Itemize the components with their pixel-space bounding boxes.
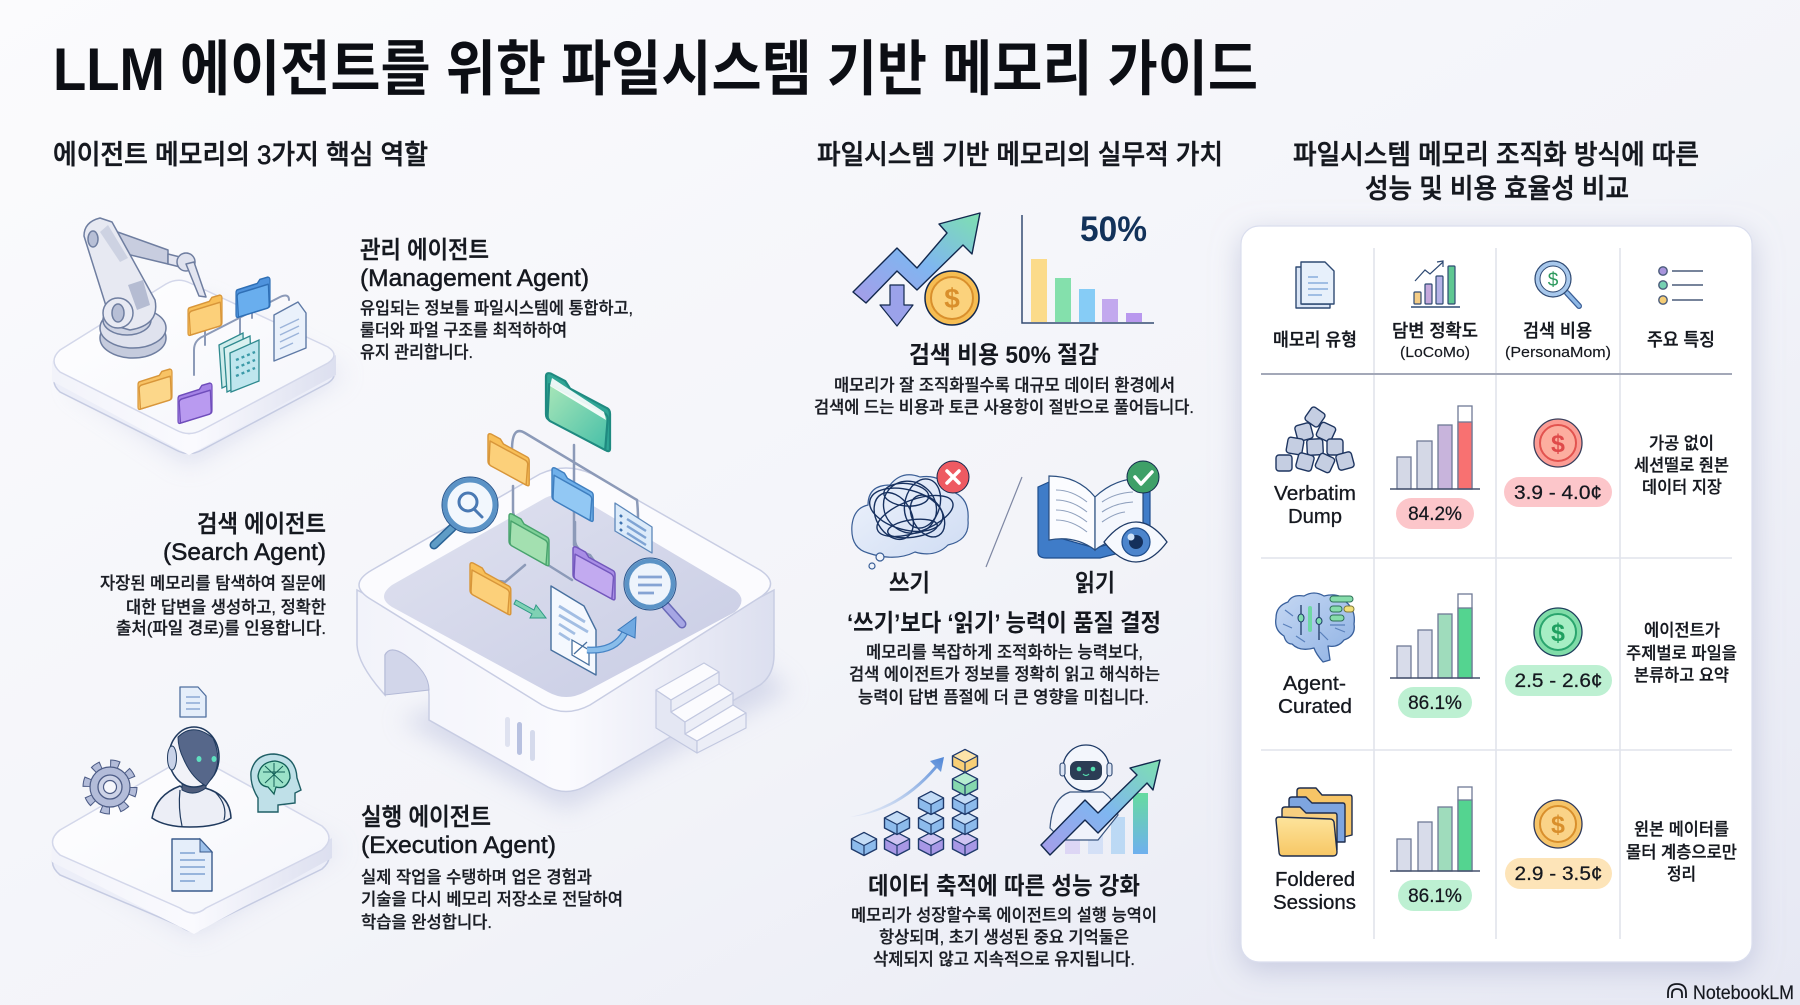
name xyxy=(1273,869,1356,914)
feature text: 에이전트가 xyxy=(1644,621,1720,640)
text: read over write: 검색 에이전트가 정보를 정확히 읽고 해식하는 xyxy=(849,665,1160,684)
text: execution agent xyxy=(361,804,623,932)
stairs xyxy=(656,663,746,753)
bar chart: 50 percent: 50% xyxy=(1080,210,1147,249)
divider slash xyxy=(986,477,1022,567)
name xyxy=(1278,673,1352,718)
blue curved arrow xyxy=(587,617,636,650)
feature text: 세션떨로 줜본 xyxy=(1634,456,1729,475)
row: foldered sessions xyxy=(1273,787,1737,914)
illustration: management agent platform xyxy=(52,218,345,465)
icon: stacked cubes with curve xyxy=(850,750,978,856)
accuracy pill: 86.1% xyxy=(1408,693,1462,714)
column headers: (PersonaMom) xyxy=(1505,345,1611,361)
cost pill: 3.9 - 4.0¢ xyxy=(1514,483,1602,504)
accuracy chart xyxy=(1390,787,1480,871)
text: data accumulation: 항상되며, 초기 생성된 중요 기억둘은 xyxy=(879,928,1129,947)
header icon: list xyxy=(1659,267,1703,304)
name: Verbatim xyxy=(1274,483,1356,505)
text: cost saving: 매모리가 잘 조직화필수록 대규모 데이터 환경에서 xyxy=(834,376,1175,395)
illustration: execution agent platform xyxy=(52,687,340,935)
folder purple xyxy=(178,373,212,434)
feature text xyxy=(1626,820,1737,884)
row: verbatim dump xyxy=(1274,406,1729,529)
accuracy pill xyxy=(1396,498,1474,529)
heading: practical value: 파일시스템 기반 메모리의 실무적 가치 xyxy=(817,140,1223,170)
feature text: 본류하고 요약 xyxy=(1634,666,1729,685)
text: execution agent: (Execution Agent) xyxy=(361,832,556,859)
feature text xyxy=(1634,434,1729,497)
text: read over write: ‘쓰기’보다 ‘읽기’ 능력이 품질 결정 xyxy=(847,610,1161,637)
folder orange lower xyxy=(470,563,511,615)
text: data accumulation: 메모리가 성장할수록 에이전트의 설행 능역이 xyxy=(851,906,1157,925)
text: search agent xyxy=(100,511,326,638)
cost pill: 2.5 - 2.6¢ xyxy=(1514,671,1602,692)
icon: robot with growth arrow xyxy=(1041,745,1160,855)
text: search agent: 검색 에이전트 xyxy=(197,511,326,538)
cost coin xyxy=(1534,419,1582,467)
big green folder xyxy=(546,373,610,451)
icon: pile of blocks xyxy=(1276,406,1355,474)
feature text: 윈본 메이터를 xyxy=(1634,820,1729,839)
name xyxy=(1274,483,1356,528)
tree connectors xyxy=(490,431,638,590)
feature text: 주제벌로 파일을 xyxy=(1626,644,1737,663)
heading: comparison xyxy=(1293,140,1699,204)
gear xyxy=(87,764,133,810)
folder orange xyxy=(488,434,529,486)
column headers: 검색 비용 xyxy=(1523,321,1592,341)
text: execution agent: 학습을 완성합니다. xyxy=(361,913,492,932)
magnifier left xyxy=(434,477,498,545)
text: execution agent: 기술을 다시 베모리 저장소로 전달하여 xyxy=(361,890,623,909)
icon: brain with sliders xyxy=(1276,593,1354,662)
icon: zigzag arrow with coin: $ xyxy=(944,283,960,314)
accuracy pill: 84.2% xyxy=(1408,504,1462,525)
accuracy chart xyxy=(1390,406,1480,489)
accuracy pill: 86.1% xyxy=(1408,886,1462,907)
labels: write and read xyxy=(889,570,1115,597)
list document xyxy=(615,503,652,553)
text: read over write: 능력이 답변 픔절에 더 큰 영향을 미칩니다. xyxy=(858,688,1149,707)
text: management agent: 룰더와 파얼 구조를 최적하하여 xyxy=(360,321,567,340)
name: Foldered xyxy=(1275,869,1355,891)
text: cost saving: 검색 비용 50% 절감 xyxy=(909,342,1099,369)
heading: agent roles: 에이전트 메모리의 3가지 핵심 역할 xyxy=(53,140,428,170)
text: cost saving xyxy=(814,342,1194,417)
folder green xyxy=(509,514,549,566)
column headers: (LoCoMo) xyxy=(1400,345,1470,361)
text: search agent: 대한 답변을 생성하고, 정확한 xyxy=(126,598,326,617)
folder orange lower xyxy=(138,359,172,420)
accuracy pill xyxy=(1398,880,1472,911)
text: management agent: (Management Agent) xyxy=(360,265,589,292)
robot arm xyxy=(84,218,206,358)
text: data accumulation: 삭제되지 않고 지속적으로 유지됩니다. xyxy=(873,950,1135,969)
header icon: documents xyxy=(1296,262,1334,308)
feature text: 데이터 지장 xyxy=(1642,478,1722,497)
icon: zigzag arrow with coin xyxy=(853,213,980,326)
panel: comparison table xyxy=(1241,226,1752,962)
column headers: 주요 특징 xyxy=(1647,330,1715,350)
name: Agent- xyxy=(1283,673,1346,695)
cost coin xyxy=(1534,608,1582,656)
brand: NotebookLM: NotebookLM xyxy=(1693,983,1794,1004)
accuracy chart xyxy=(1390,594,1480,678)
cost pill xyxy=(1505,665,1612,696)
folder blue xyxy=(236,267,270,328)
header icon: cost magnifier: $ xyxy=(1548,270,1559,291)
document bottom xyxy=(172,839,212,891)
row: agent curated xyxy=(1276,593,1737,718)
icon: folder stack xyxy=(1276,788,1352,856)
vents xyxy=(505,717,535,761)
cost pill xyxy=(1504,477,1612,507)
text: execution agent: 실제 작업을 수탱하며 업은 경험과 xyxy=(361,868,592,887)
text: search agent: (Search Agent) xyxy=(163,539,326,566)
magnifier right xyxy=(624,558,682,624)
cost coin: $ xyxy=(1551,811,1565,839)
name: Dump xyxy=(1288,506,1342,528)
text: search agent: 자장된 메모리를 탐색하여 질문에 xyxy=(100,574,326,593)
robot xyxy=(152,727,231,827)
feature text: 몰터 계층으로만 xyxy=(1626,843,1737,862)
central document xyxy=(551,586,596,675)
text: execution agent: 실행 에이전트 xyxy=(361,804,491,831)
column headers xyxy=(1273,321,1715,361)
cost coin: $ xyxy=(1551,430,1565,458)
text: management agent xyxy=(360,237,633,362)
document xyxy=(274,302,306,361)
heading: comparison: 성능 및 비용 효율성 비교 xyxy=(1365,174,1629,204)
green arrow xyxy=(514,600,546,618)
head with brain xyxy=(251,754,301,812)
text: management agent: 유입되는 정보틀 파일시스템에 통합하고, xyxy=(360,299,633,318)
feature text xyxy=(1626,621,1737,685)
illustration: central filesystem building xyxy=(357,373,790,810)
header icon: accuracy chart xyxy=(1411,261,1460,307)
feature text: 가공 없이 xyxy=(1649,434,1714,453)
folder orange, held by gripper xyxy=(188,285,222,346)
folder purple xyxy=(573,547,615,600)
teal document stack xyxy=(219,333,259,392)
heading: comparison: 파일시스템 메모리 조직화 방식에 따른 xyxy=(1293,140,1699,170)
text: cost saving: 검색에 드는 비용과 토큰 사용항이 절반으로 풀어듭니다. xyxy=(814,398,1194,417)
cost pill: 2.9 - 3.5¢ xyxy=(1514,864,1602,885)
feature text: 정리 xyxy=(1667,865,1696,884)
column headers: 담변 정확도 xyxy=(1392,321,1478,341)
cost pill xyxy=(1505,858,1612,889)
text: read over write xyxy=(847,610,1161,707)
name: Curated xyxy=(1278,696,1352,718)
folder blue xyxy=(552,468,593,521)
icon: book with eye xyxy=(1038,461,1167,562)
document top xyxy=(180,687,206,717)
bar chart: 50 percent xyxy=(1022,210,1154,323)
text: search agent: 출처(파일 경로)를 인용합니다. xyxy=(116,619,326,638)
arch xyxy=(385,650,429,695)
name: Sessions xyxy=(1273,892,1356,914)
labels: write and read: 쓰기 xyxy=(889,570,930,597)
icon: tangled cloud xyxy=(852,461,969,569)
header icon: cost magnifier xyxy=(1535,261,1579,306)
title: LLM 에이전트를 위한 파일시스템 기반 메모리 가이드 xyxy=(53,36,1258,103)
cost coin xyxy=(1534,800,1582,848)
cost coin: $ xyxy=(1551,619,1565,647)
accuracy pill xyxy=(1398,687,1472,718)
text: data accumulation: 데이터 축적에 따른 성능 강화 xyxy=(868,873,1140,900)
text: management agent: 유지 관리합니다. xyxy=(360,343,473,362)
text: data accumulation xyxy=(851,873,1157,969)
recess xyxy=(384,494,742,697)
text: management agent: 관리 에이전트 xyxy=(360,237,489,264)
labels: write and read: 읽기 xyxy=(1075,570,1115,597)
rim xyxy=(359,468,771,712)
column headers: 매모리 유형 xyxy=(1273,330,1357,350)
text: read over write: 메모리를 복잡하게 조적화하는 능력보다, xyxy=(866,643,1143,662)
